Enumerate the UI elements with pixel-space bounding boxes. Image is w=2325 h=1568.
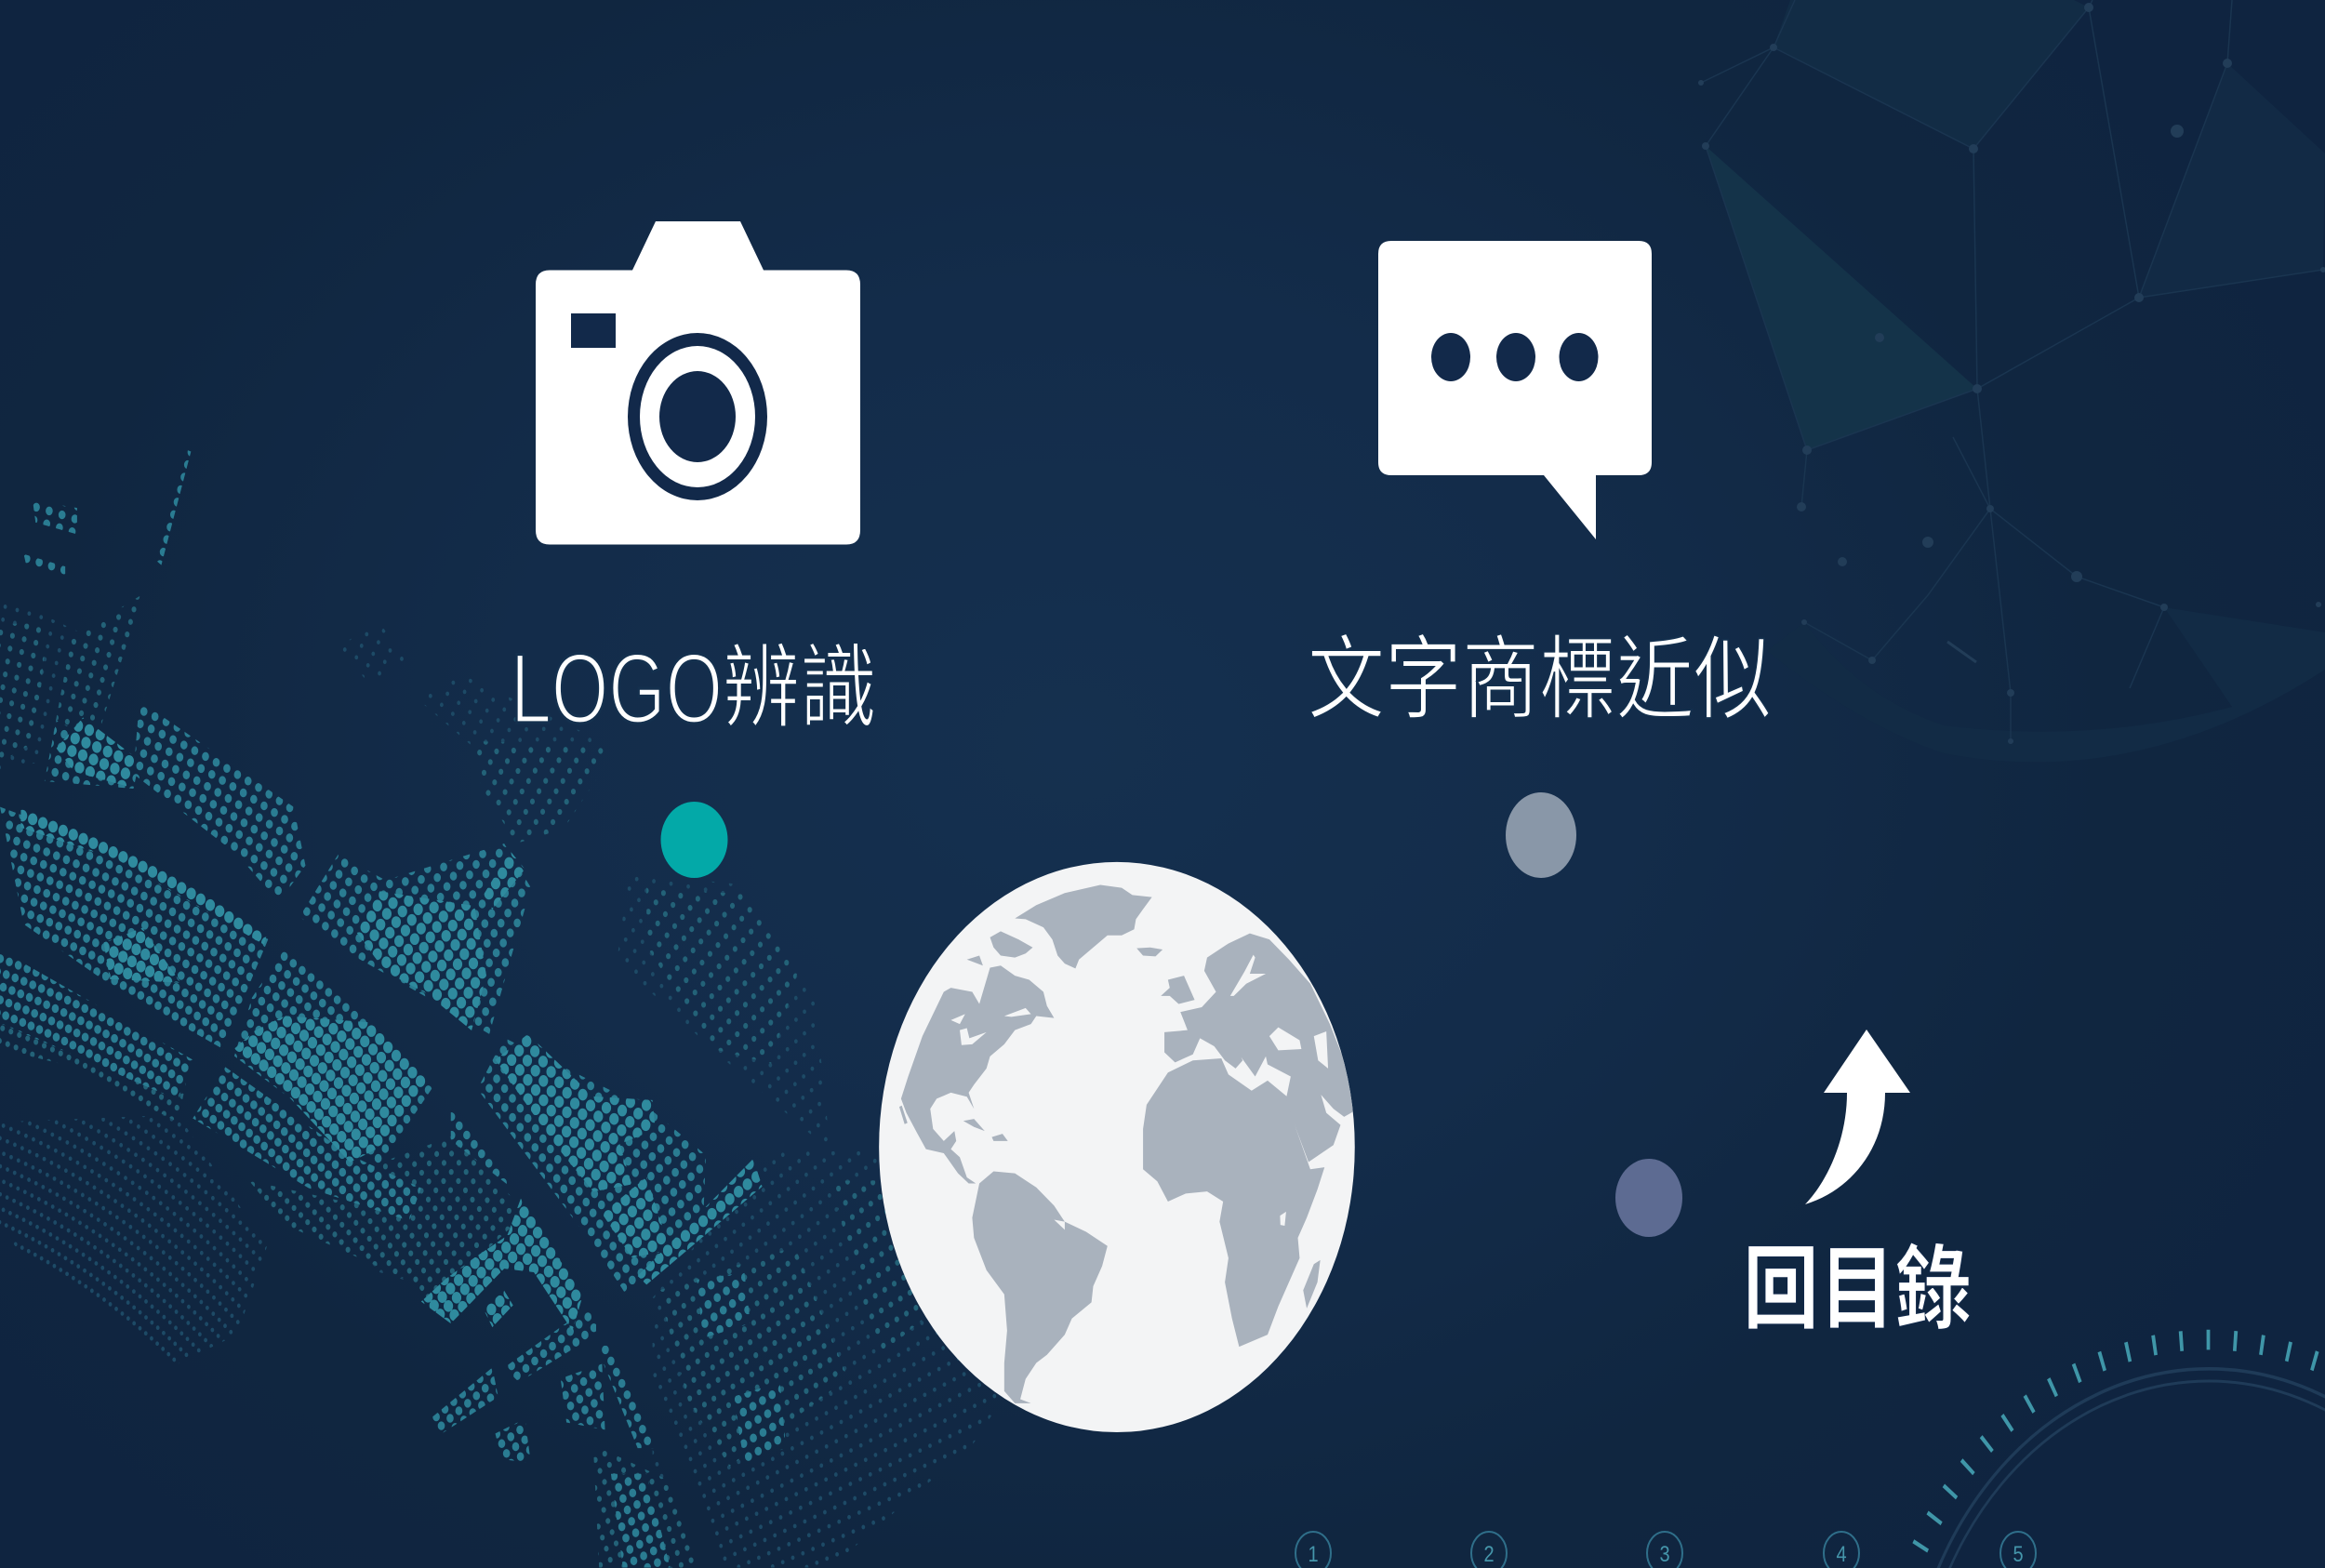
page number markers: 5 — [2013, 1541, 2024, 1566]
dot: slate blue — [1615, 1159, 1682, 1237]
halftone dot arcs bottom left — [0, 450, 997, 1568]
label: 文字商標近似: 文字商標近似 — [1308, 630, 1771, 731]
page number markers: 4 — [1836, 1541, 1847, 1566]
tick ring bottom right — [1881, 1340, 2325, 1568]
label: 回目錄: 回目錄 — [1743, 1239, 1972, 1341]
arrow — [1805, 1030, 1910, 1204]
label: LOGO辨識: LOGO — [511, 633, 723, 744]
label: LOGO辨識 — [511, 633, 877, 744]
globe — [879, 862, 1355, 1432]
page number markers — [1295, 1532, 2036, 1568]
page number markers: 2 — [1483, 1541, 1495, 1566]
dot: teal — [660, 802, 727, 878]
label: LOGO辨識: 辨識 — [723, 638, 877, 739]
icon: speech bubble — [1378, 241, 1652, 539]
dot: grey — [1506, 792, 1576, 878]
page number markers: 1 — [1308, 1541, 1319, 1566]
icon: camera — [536, 221, 860, 545]
network mesh decoration top right — [1698, 0, 2325, 762]
page number markers: 3 — [1659, 1541, 1670, 1566]
